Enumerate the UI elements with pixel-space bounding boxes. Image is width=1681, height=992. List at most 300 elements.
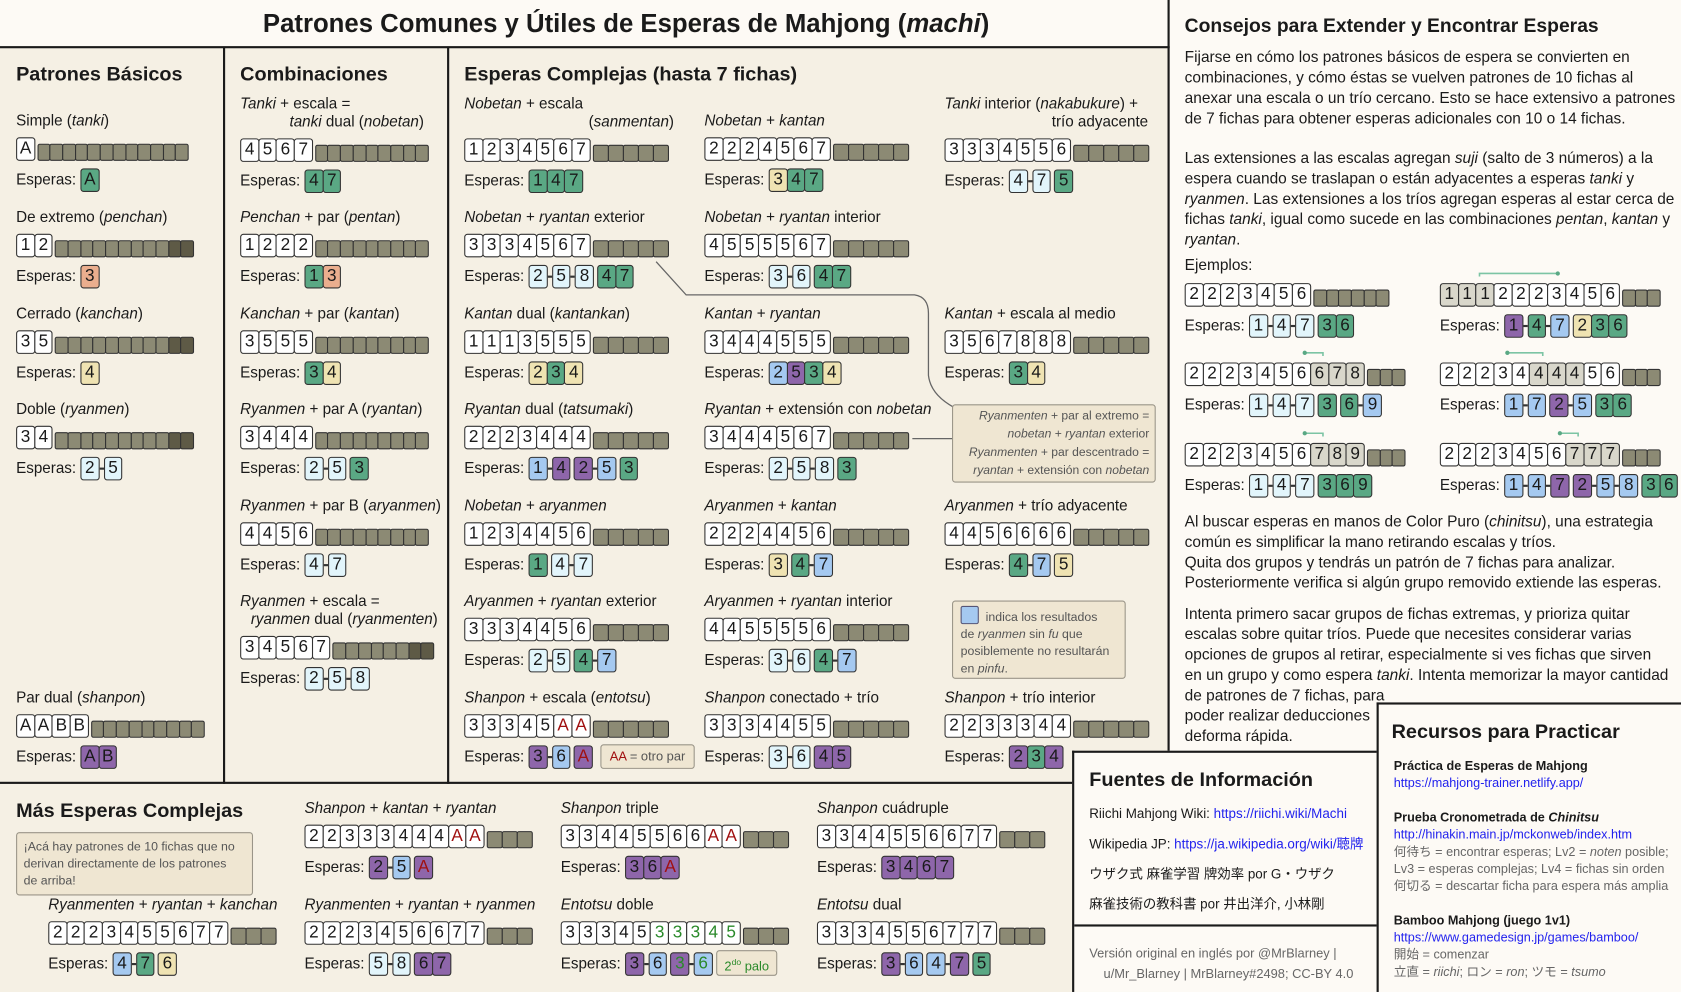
example 5: Esperas: [1185, 477, 1245, 494]
complex: nobetan ryantan int: 5 [727, 236, 737, 254]
more: shanpon cuadruple: 3 [886, 858, 895, 876]
example 5: 6 [1297, 445, 1306, 463]
more: ryanmenten ryantan ryanmen [304, 897, 535, 976]
example 2: 1 [1509, 316, 1518, 335]
complex: sanmentan: 5 [540, 140, 550, 159]
complex: tatsumaki: 2 [487, 428, 496, 446]
heading: recursos: Recursos para Practicar [1392, 720, 1620, 742]
complex: shanpon conectado: 4 [819, 747, 828, 766]
complex: nobetan aryanmen: 7 [579, 556, 588, 574]
complex: nobetan aryanmen: 4 [523, 524, 532, 543]
text: fuentes list: ウザク式 麻雀学習 牌効率 por G・ウザク [1089, 866, 1335, 882]
pattern: tanki: Esperas: [16, 172, 76, 189]
complex: kantankan: 5 [540, 332, 550, 351]
combo: pentan: Esperas: [240, 268, 300, 285]
more: ryanmenten ryantan ryanmen: 3 [363, 923, 372, 942]
combo: ryanmenten [240, 593, 438, 691]
complex: nobetan kantan: 3 [773, 171, 783, 189]
pattern: kanchan: 3 [21, 332, 30, 351]
example 4 [1440, 338, 1660, 417]
example 2: Esperas: [1440, 317, 1500, 335]
example 3: 6 [1344, 396, 1354, 414]
example 5: 2 [1225, 445, 1235, 463]
complex: sanmentan: 1 [533, 172, 543, 190]
combo: kantan: 5 [263, 332, 272, 351]
complex: tatsumaki: 4 [558, 428, 568, 446]
more: entotsu dual: 5 [911, 923, 921, 942]
combo: ryanmenten: 5 [281, 638, 290, 656]
complex: aryanmen ryantan int: Aryanmen + ryantan interior [704, 593, 893, 610]
combo: ryantan: 3 [245, 428, 254, 446]
example 5: 3 [1243, 445, 1253, 463]
complex: sanmentan: 7 [576, 140, 586, 159]
more: ryanmenten ryantan ryanmen: 2 [309, 923, 319, 942]
complex: aryanmen trio: 6 [1003, 524, 1012, 543]
complex: nobetan ryantan ext: 4 [523, 236, 532, 254]
complex: shanpon trio interior: 3 [985, 716, 995, 735]
more: ryanmenten ryantan ryanmen: 5 [373, 954, 383, 973]
complex: ryantan ext nobetan: 3 [842, 459, 852, 477]
combo: ryanmenten: 5 [332, 669, 342, 687]
pattern: tanki: A [84, 171, 96, 189]
text: recursos list: 開始 = comenzar [1394, 947, 1489, 962]
example 1: 6 [1297, 285, 1306, 303]
text: consejos p1 [1185, 49, 1675, 128]
more: shanpon triple: A [665, 858, 676, 876]
text: prioridad: deforma rápida. [1185, 728, 1293, 745]
complex: nobetan aryanmen [464, 498, 669, 577]
combo: aryanmen: Esperas: [240, 557, 300, 574]
example 4: 5 [1588, 365, 1597, 383]
complex: nakabukure: 5 [1059, 172, 1068, 190]
complex: shanpon conectado: Esperas: [704, 749, 764, 766]
text: fuentes list: 麻雀技術の教科書 por 井出洋介, 小林剛 [1089, 897, 1325, 912]
more: shanpon cuadruple: 3 [822, 827, 831, 845]
complex: kantan escala medio: 3 [1013, 364, 1023, 382]
example 2: 4 [1570, 285, 1579, 303]
more: entotsu dual: 6 [929, 923, 939, 942]
example 3: 2 [1225, 365, 1235, 383]
more: shanpon cuadruple: 6 [929, 827, 939, 845]
title band [0, 0, 1169, 47]
combo: pentan: 3 [327, 267, 337, 285]
text: consejos p1: combinaciones, y cómo éstas se vuelven patrones de 10 fichas al [1185, 70, 1633, 87]
text: recursos list: Práctica de Esperas de Mahjong [1394, 758, 1588, 773]
more: shanpon kantan ryantan: 2 [309, 827, 319, 845]
complex: shanpon trio interior: 4 [1039, 716, 1048, 735]
more: shanpon kantan ryantan: 5 [397, 858, 406, 876]
example 1: 4 [1261, 285, 1270, 303]
pattern: ryanmen [16, 401, 194, 480]
example 6: 4 [1532, 476, 1542, 494]
example 6: 4 [1516, 445, 1526, 463]
note: AA otro par: AA = otro par [610, 749, 685, 764]
more: shanpon cuadruple: 4 [875, 827, 885, 845]
more: ryanmenten ryantan kanchan: 4 [117, 954, 127, 973]
complex: ryantan ext nobetan: 4 [727, 428, 737, 446]
complex: nakabukure [944, 95, 1150, 193]
more: shanpon triple [560, 800, 790, 880]
complex: shanpon trio interior: 2 [949, 716, 959, 735]
complex: nakabukure: 3 [985, 140, 995, 159]
text: recursos list: 何切る = descartar ficha para espera más amplia [1394, 878, 1668, 893]
complex: aryanmen ryantan int: 6 [816, 620, 826, 638]
complex: aryanmen ryantan ext: 5 [558, 620, 568, 638]
complex: aryanmen ryantan ext: Esperas: [464, 652, 524, 669]
complex: entotsu: 5 [540, 716, 550, 735]
complex: tatsumaki: 2 [579, 459, 588, 477]
example 2: 1 [1445, 285, 1454, 303]
more: shanpon cuadruple [816, 800, 1046, 880]
example 5: 2 [1189, 445, 1199, 463]
example 2: 2 [1577, 316, 1587, 335]
combo: aryanmen: 4 [263, 524, 272, 543]
complex: nobetan ryantan int: 5 [763, 236, 772, 254]
example 4: 2 [1480, 365, 1490, 383]
combo: kantan [240, 306, 429, 385]
complex: nobetan ryantan int: 6 [797, 267, 806, 285]
callout: ryanmenten: Ryanmenten + par al extremo = [979, 410, 1149, 423]
combo: ryantan [240, 401, 429, 480]
complex: nobetan ryantan int: Esperas: [704, 268, 764, 285]
combo: ryanmenten: ryanmen dual (ryanmenten) [251, 611, 438, 628]
complex: sanmentan: 4 [523, 140, 532, 159]
more: ryanmenten ryantan kanchan: 6 [163, 954, 172, 973]
complex: ryantan ext nobetan: 8 [820, 459, 829, 477]
example 1: 2 [1207, 285, 1217, 303]
text: consejos p2: espera cuando se traslapan o están adyacentes a esperas tanki y [1185, 171, 1634, 188]
example 3: 3 [1322, 396, 1332, 414]
more: shanpon cuadruple: Esperas: [817, 859, 877, 876]
more: shanpon kantan ryantan: A [418, 858, 429, 876]
text: chinitsu: Al buscar esperas en manos de Color Puro (chinitsu), una estrategia [1185, 514, 1653, 531]
complex: shanpon trio interior: 2 [1013, 747, 1023, 766]
more: entotsu dual: 4 [875, 923, 885, 942]
example 2: 3 [1595, 316, 1605, 335]
complex: kantankan: 1 [505, 332, 514, 351]
more: entotsu doble: 5 [726, 923, 736, 942]
legend: blue tile: posiblemente no resultarán [961, 646, 1109, 658]
example 6: 2 [1480, 445, 1490, 463]
combo: ryantan: 2 [309, 459, 319, 477]
complex: nakabukure: 4 [1003, 140, 1012, 159]
more: entotsu doble: 6 [653, 954, 662, 973]
combo: kantan: Esperas: [240, 365, 300, 382]
combo: nobetan: 4 [309, 172, 319, 190]
text: prioridad: escalas sobre quitar tríos. Puede que necesites considerar varias [1185, 626, 1631, 643]
complex: nobetan kantan: 4 [791, 171, 801, 189]
more: ryanmenten ryantan ryanmen: 8 [397, 954, 406, 973]
complex: aryanmen ryantan int: 4 [709, 620, 719, 638]
example 1: 6 [1340, 316, 1350, 335]
complex: nobetan ryantan int: 5 [781, 236, 790, 254]
more: entotsu dual: Entotsu dual [817, 897, 902, 914]
complex: aryanmen kantan: 6 [816, 524, 826, 543]
combo: ryanmenten: 4 [263, 638, 272, 656]
heading: Combinaciones: Combinaciones [240, 62, 388, 85]
example 4: 5 [1577, 396, 1587, 414]
complex: nobetan ryantan int: 7 [816, 236, 826, 254]
complex: nobetan aryanmen: 4 [555, 556, 565, 574]
combo: aryanmen: 6 [299, 524, 308, 543]
complex: kantan escala medio: 5 [967, 332, 977, 351]
combo: aryanmen: 7 [332, 556, 342, 574]
more: shanpon triple: 4 [601, 827, 611, 845]
complex: aryanmen kantan: 4 [763, 524, 772, 543]
example 4: 4 [1570, 365, 1579, 383]
more: ryanmenten ryantan kanchan: 5 [142, 923, 152, 942]
more: shanpon cuadruple: 7 [983, 827, 992, 845]
combo: ryantan: Esperas: [240, 460, 300, 477]
complex: nobetan ryantan ext: 3 [505, 236, 514, 254]
combo: pentan: 2 [281, 236, 290, 254]
text: prioridad: opciones de grupos al retirar, especialmente si ves fichas que sirven [1185, 647, 1651, 664]
complex: kantan ryantan: 5 [791, 364, 801, 382]
example 3: 7 [1333, 365, 1342, 383]
more: entotsu dual: Esperas: [817, 956, 877, 973]
combo: ryanmenten: 7 [316, 638, 326, 656]
complex: shanpon conectado: 4 [763, 716, 772, 735]
complex: kantan escala medio: Esperas: [945, 365, 1005, 382]
pattern: ryanmen: Esperas: [16, 460, 76, 477]
text: recursos list: Prueba Cronometrada de Chinitsu [1394, 810, 1599, 825]
complex: nobetan ryantan ext: 6 [558, 236, 568, 254]
complex: aryanmen trio: 6 [1057, 524, 1066, 543]
callout: ryanmenten [952, 404, 1156, 483]
combo: pentan: 2 [263, 236, 272, 254]
example 6: 1 [1509, 476, 1518, 494]
complex: kantan escala medio: 4 [1031, 364, 1041, 382]
more: entotsu dual: 5 [977, 954, 986, 973]
complex: tatsumaki: 4 [540, 428, 550, 446]
pattern: penchan: 3 [85, 267, 95, 285]
complex: ryantan ext nobetan: 3 [709, 428, 719, 446]
right panel background [1169, 0, 1681, 992]
complex: kantan escala medio: 6 [985, 332, 995, 351]
complex: nakabukure: 7 [1037, 172, 1046, 190]
more: shanpon kantan ryantan: 4 [417, 827, 426, 845]
combo: ryanmenten: 8 [356, 669, 365, 687]
example 1: 1 [1254, 316, 1263, 335]
text: recursos list: https://www.gamedesign.jp/games/bamboo/ [1394, 930, 1638, 945]
example 3: 6 [1315, 365, 1324, 383]
complex: shanpon conectado: 4 [781, 716, 790, 735]
more: ryanmenten ryantan kanchan: 7 [140, 954, 150, 973]
callout: ryanmenten: ryantan + extensión con nobetan [973, 464, 1149, 477]
example 2 [1440, 258, 1660, 338]
more: entotsu doble: 3 [675, 954, 685, 973]
connector lines [656, 261, 952, 440]
combo: aryanmen: 4 [245, 524, 254, 543]
more: ryanmenten ryantan ryanmen: 7 [470, 923, 480, 942]
note: 10 fichas: derivan directamente de los patrones [24, 858, 226, 871]
example 1: 4 [1277, 316, 1286, 335]
complex: entotsu: A [557, 716, 569, 735]
combo: nobetan: 7 [327, 172, 337, 190]
complex: kantan ryantan: 3 [809, 364, 819, 382]
example 4: 4 [1516, 365, 1526, 383]
note: 2do palo [716, 950, 777, 976]
complex: kantan ryantan: 5 [816, 332, 826, 351]
example 6: 6 [1664, 476, 1674, 494]
complex: shanpon conectado: 5 [799, 716, 808, 735]
complex: shanpon conectado: 3 [745, 716, 754, 735]
complex: nobetan ryantan ext: 5 [556, 267, 566, 285]
pattern: tanki [16, 113, 189, 192]
legend: blue tile: de ryanmen sin fu que [961, 628, 1083, 641]
complex: sanmentan: 7 [569, 172, 579, 190]
complex: aryanmen ryantan ext: 3 [469, 620, 478, 638]
example 3: 5 [1279, 365, 1288, 383]
more: ryanmenten ryantan kanchan [48, 897, 277, 976]
legend: blue tile: indica los resultados [986, 611, 1097, 624]
more: ryanmenten ryantan kanchan: 3 [107, 923, 116, 942]
complex: aryanmen ryantan ext [464, 593, 669, 672]
example 4: 2 [1554, 396, 1564, 414]
combo: pentan: 1 [309, 267, 319, 285]
complex: aryanmen kantan: 2 [745, 524, 754, 543]
combo: pentan: 1 [245, 236, 254, 254]
complex: aryanmen trio: 7 [1037, 556, 1046, 574]
text: prioridad: de patrones de 7 fichas, para [1185, 687, 1385, 705]
more: shanpon triple: 4 [619, 827, 629, 845]
combo: nobetan: 6 [281, 140, 290, 159]
combo: ryantan: 4 [281, 428, 290, 446]
more: entotsu dual: 3 [840, 923, 849, 942]
more: shanpon cuadruple: 7 [965, 827, 974, 845]
example 4: 4 [1552, 365, 1561, 383]
complex: aryanmen trio: 6 [1021, 524, 1030, 543]
complex: shanpon conectado [704, 690, 910, 769]
complex: nakabukure: 3 [967, 140, 977, 159]
complex: shanpon trio interior: Esperas: [945, 749, 1005, 766]
complex: aryanmen ryantan int: 5 [781, 620, 790, 638]
complex: entotsu: 4 [523, 716, 532, 735]
pattern: kanchan: Cerrado (kanchan) [16, 306, 143, 323]
text: consejos p1: de 7 fichas para obtener esperas adicionales con 10 o 14 fichas. [1185, 110, 1626, 128]
example 5: 4 [1277, 476, 1286, 494]
example 4: 6 [1606, 365, 1615, 383]
complex: ryantan ext nobetan: 6 [799, 428, 808, 446]
complex: aryanmen ryantan int: 6 [797, 651, 806, 669]
more: shanpon cuadruple: 5 [911, 827, 921, 845]
example 5: 9 [1350, 445, 1360, 463]
complex: kantankan: 3 [523, 332, 532, 351]
more: entotsu doble: 3 [655, 923, 664, 942]
more: ryanmenten ryantan kanchan: 2 [89, 923, 98, 942]
more: entotsu dual: 3 [886, 954, 895, 973]
more: shanpon cuadruple: 3 [840, 827, 849, 845]
complex: shanpon trio interior: 3 [1031, 747, 1041, 766]
complex: nobetan aryanmen: 6 [576, 524, 586, 543]
more: shanpon cuadruple: 5 [893, 827, 903, 845]
complex: nakabukure: Tanki interior (nakabukure) + [945, 95, 1138, 113]
more: ryanmenten ryantan ryanmen: 6 [419, 954, 428, 973]
example 6: 7 [1570, 445, 1579, 463]
complex: aryanmen ryantan int: Esperas: [704, 652, 764, 669]
text: fuentes list: Wikipedia JP: https://ja.wikipedia.org/wiki/聴牌 [1089, 836, 1363, 851]
more: ryanmenten ryantan kanchan: Esperas: [48, 956, 108, 973]
heading: Esperas Complejas: Esperas Complejas (hasta 7 fichas) [464, 62, 797, 85]
example 4: 6 [1618, 396, 1627, 414]
example 4: 3 [1498, 365, 1508, 383]
pattern: shanpon: B [74, 716, 85, 735]
complex: shanpon conectado: 3 [773, 747, 783, 766]
more: shanpon kantan ryantan: 2 [373, 858, 383, 876]
text: consejos p1: Fijarse en cómo los patrones básicos de espera se convierten en [1185, 49, 1630, 66]
complex: aryanmen kantan: 4 [781, 524, 790, 543]
combo: aryanmen [240, 498, 441, 577]
more: entotsu dual: 3 [857, 923, 867, 942]
complex: entotsu: 3 [533, 747, 543, 766]
example 2: 6 [1606, 285, 1615, 303]
more: ryanmenten ryantan kanchan: 7 [214, 923, 224, 942]
complex: kantankan: 4 [569, 364, 579, 382]
complex: sanmentan [464, 95, 674, 193]
complex: aryanmen trio: 4 [1013, 556, 1023, 574]
example 4: 2 [1445, 365, 1454, 383]
example 6: 3 [1498, 445, 1508, 463]
complex: sanmentan: (sanmentan) [589, 114, 674, 131]
complex: nobetan ryantan ext: Nobetan + ryantan exterior [464, 209, 645, 226]
more: entotsu doble: 6 [698, 954, 708, 973]
complex: aryanmen trio: 6 [1039, 524, 1048, 543]
note: AA otro par [600, 744, 695, 769]
combo: kantan: 5 [299, 332, 308, 351]
more: entotsu doble: 3 [601, 923, 611, 942]
complex: aryanmen ryantan int: 4 [727, 620, 737, 638]
complex: entotsu [464, 690, 669, 769]
example 2: 1 [1480, 285, 1490, 303]
complex: kantan ryantan: 3 [709, 332, 719, 351]
complex: nobetan ryantan int: 3 [773, 267, 783, 285]
complex: aryanmen ryantan int: 3 [773, 651, 783, 669]
pattern: shanpon: Par dual (shanpon) [16, 690, 145, 707]
complex: entotsu: 6 [556, 747, 566, 766]
complex: shanpon conectado: 3 [709, 716, 719, 735]
heading: Patrones Básicos: Patrones Básicos [16, 62, 183, 85]
complex: nakabukure: trío adyacente [1052, 114, 1148, 131]
example 1 [1185, 258, 1388, 338]
complex: nakabukure: 5 [1039, 140, 1048, 159]
complex: sanmentan: 6 [558, 140, 568, 159]
combo: ryantan: 3 [355, 459, 364, 477]
more: shanpon kantan ryantan: 4 [434, 827, 444, 845]
example 3: 3 [1243, 365, 1253, 383]
complex: shanpon trio interior: 4 [1049, 747, 1059, 766]
complex: nobetan ryantan int: 7 [837, 267, 846, 285]
more: entotsu doble: 4 [709, 923, 718, 942]
more: shanpon cuadruple: Shanpon cuádruple [817, 800, 949, 817]
complex: nobetan aryanmen: 1 [533, 556, 543, 574]
complex: nobetan ryantan int: 4 [709, 236, 719, 254]
text: ejemplos: Ejemplos: [1185, 257, 1252, 275]
example 2: 3 [1552, 285, 1561, 303]
more: shanpon cuadruple: 7 [940, 858, 949, 876]
complex: kantankan: Kantan dual (kantankan) [464, 306, 630, 323]
more: entotsu doble: 5 [637, 923, 647, 942]
complex: aryanmen kantan: 4 [796, 556, 805, 574]
example 2: 5 [1588, 285, 1597, 303]
text: recursos list: 立直 = riichi; ロン = ron; ツモ = tsumo [1394, 964, 1606, 979]
complex: nobetan kantan: 7 [816, 139, 826, 158]
complex: ryantan ext nobetan: 4 [745, 428, 754, 446]
complex: kantan ryantan: 4 [745, 332, 754, 351]
complex: nobetan ryantan ext: 7 [576, 236, 586, 254]
more: entotsu doble: 3 [583, 923, 593, 942]
complex: kantan ryantan: 4 [763, 332, 772, 351]
complex: aryanmen kantan: Esperas: [704, 557, 764, 574]
